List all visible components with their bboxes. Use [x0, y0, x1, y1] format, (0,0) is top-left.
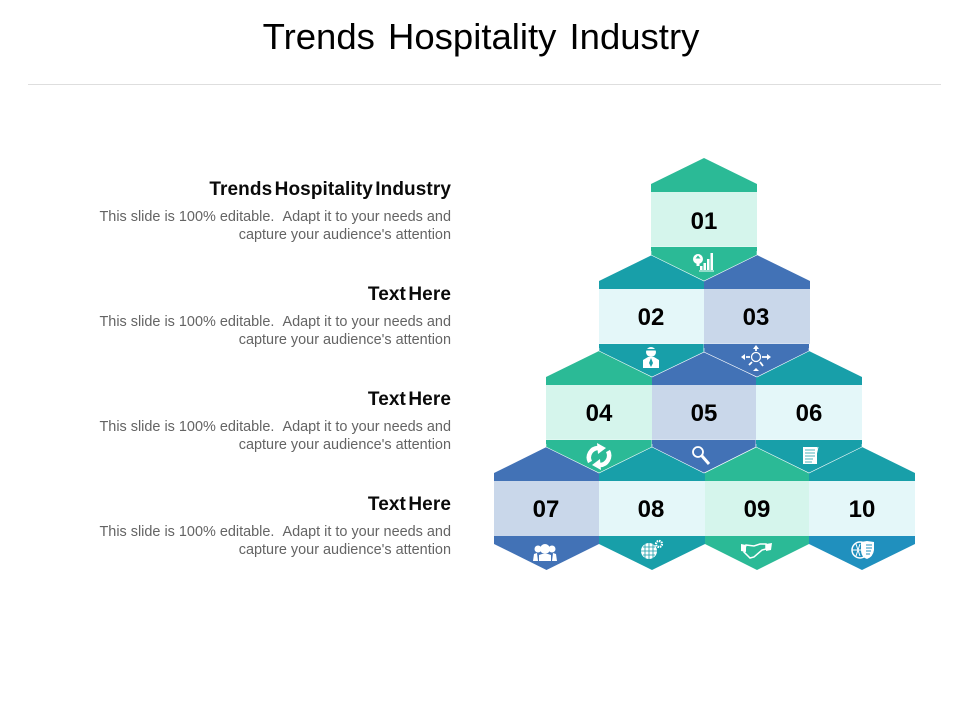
text block: text here 2: This slide is 100% editable. Adapt it to your needs and [99, 419, 451, 435]
icon: handshake [741, 543, 772, 558]
hexagon 07 [494, 447, 599, 570]
text block: text here 3: Text Here [368, 494, 451, 515]
hexagon 07: 07 [533, 496, 559, 523]
hexagon 09: 09 [744, 496, 770, 523]
hexagon 08: 08 [638, 496, 664, 523]
hexagon 03 [704, 255, 810, 377]
hexagon 03: 03 [743, 304, 769, 331]
hexagon 01 [651, 158, 757, 281]
icon: shield and globe [852, 541, 874, 559]
icon: arrows from centre [741, 345, 771, 371]
hexagon 01: 01 [691, 208, 717, 235]
text block: text here 3: This slide is 100% editable. Adapt it to your needs and [99, 524, 451, 540]
text block: trends hospitality industry: Trends Hospitality Industry [209, 179, 451, 200]
text block: text here 2: capture your audience's attention [239, 437, 451, 453]
hexagon 04 [546, 351, 652, 473]
hexagon 02 [599, 255, 704, 377]
icon: notepad [803, 447, 818, 464]
icon: refresh arrows [589, 443, 609, 470]
hexagon 02: 02 [638, 304, 664, 331]
hexagon 09 [705, 447, 809, 570]
hexagon 10: 10 [849, 496, 875, 523]
text block: text here 2: Text Here [368, 389, 451, 410]
icon: magnifier [693, 447, 709, 464]
text block: text here 1: capture your audience's attention [239, 332, 451, 348]
text block: text here 2 [99, 389, 451, 453]
hexagon 08 [599, 447, 705, 570]
hexagon 05 [652, 351, 756, 473]
text block: trends hospitality industry [99, 179, 451, 243]
text block: text here 3 [99, 494, 451, 558]
text block: text here 1: This slide is 100% editable. Adapt it to your needs and [99, 314, 451, 330]
hexagon 06 [756, 351, 862, 473]
text block: trends hospitality industry: capture your audience's attention [239, 227, 451, 243]
text block: text here 1: Text Here [368, 284, 451, 305]
hexagon 05: 05 [691, 400, 717, 427]
icon: businessman [643, 347, 659, 368]
text block: trends hospitality industry: This slide is 100% editable. Adapt it to your needs and [99, 209, 451, 225]
hexagon 04: 04 [586, 400, 613, 427]
icon: team [533, 544, 557, 561]
hexagon 06: 06 [796, 400, 822, 427]
hexagon 10 [809, 447, 915, 570]
text block: text here 3: capture your audience's attention [239, 542, 451, 558]
title: Trends Hospitality Industry [263, 16, 699, 57]
icon: globe and gear [641, 541, 662, 559]
text block: text here 1 [99, 284, 451, 348]
icon: bar chart with bulb [693, 253, 714, 272]
